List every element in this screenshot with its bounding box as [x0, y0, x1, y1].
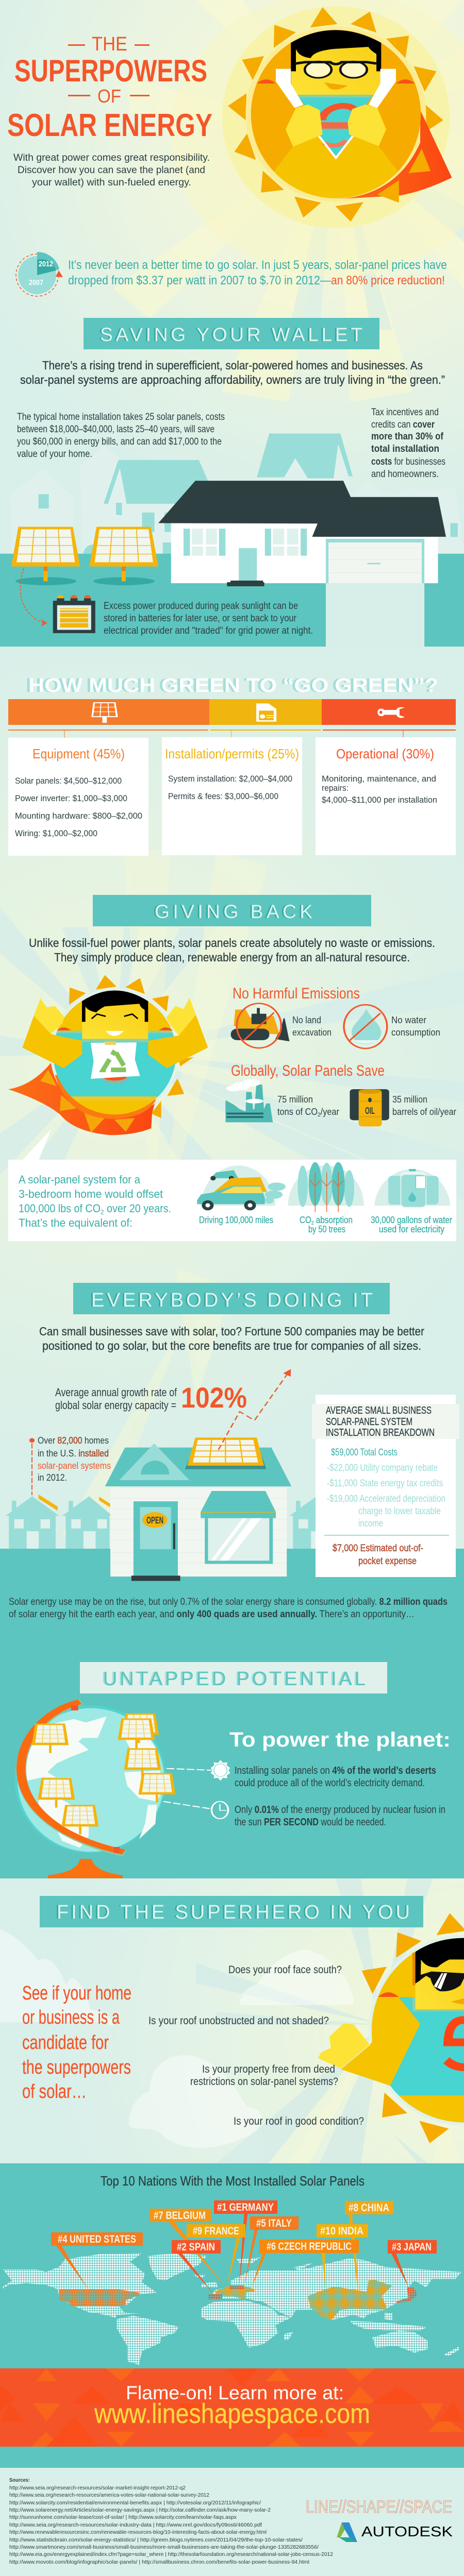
breakdown list: -$22,000 Utility company rebate [327, 1463, 438, 1473]
sources [9, 2477, 333, 2565]
text: roof questions: Is your roof in good condition? [234, 2115, 364, 2127]
text: oil saved: 35 million [392, 1094, 427, 1105]
breakdown heading: INSTALLATION BREAKDOWN [326, 1427, 435, 1438]
captions: CO [300, 1215, 313, 1225]
text: tax incentives: total installation [371, 444, 439, 454]
icon: battery [53, 595, 95, 633]
equipment list: Solar panels: $4,500–$12,000 [15, 776, 122, 786]
text: roof questions [148, 1964, 364, 2127]
shop building [105, 1437, 291, 1581]
text: offset statement: 100,000 lbs of CO [19, 1202, 110, 1215]
text: CO2 saved: 2 [318, 1112, 321, 1118]
sources: http://www.smartmoney.com/small-business/small-business/more-small-businesses-are-taking-the-solar-plunge-1335282683556/ [9, 2544, 319, 2550]
captions [199, 1215, 452, 1234]
logo: Autodesk: AUTODESK [361, 2523, 453, 2539]
equipment list: Power inverter: $1,000–$3,000 [15, 793, 127, 803]
text: solar use opportunity: Solar energy use may be on the rise, but only 0.7% of the solar energy share is consumed globally. 8.2 million quads [9, 1597, 448, 1607]
title line: OF: OF [97, 86, 121, 107]
icon: document [256, 703, 276, 722]
heading: how much green: HOW MUCH GREEN TO “GO GREEN”? [28, 675, 438, 697]
background: sky with rays (middle) [0, 647, 464, 1553]
icon: no water drop [344, 1005, 387, 1048]
text: roof questions: restrictions on solar-panel systems? [190, 2076, 338, 2088]
operational list: repairs: [322, 783, 349, 793]
text: tax incentives: Tax incentives and [371, 407, 439, 418]
sources: http://www.seia.org/research-resources/solar-market-insight-report-2012-q2 [9, 2485, 186, 2491]
sources: http://www.renewableresourcesinc.com/renewable-resources-blog/10-interesting-facts-about-solar-energy.html [9, 2529, 267, 2535]
sources: http://www.seia.org/research-resources/america-votes-solar-national-solar-survey-2012 [9, 2492, 209, 2498]
icon: pie chart 2007 to 2012 [16, 252, 63, 296]
text: 82,000 homes: solar-panel systems [38, 1461, 111, 1471]
text: typical home installation: between $18,000–$40,000, lasts 25–40 years, will save [17, 424, 214, 435]
text: deserts fact [235, 1765, 436, 1789]
cost breakdown bar with icons [8, 699, 456, 725]
stat: 102%: 102% [181, 1381, 247, 1414]
text: see if your home: See if your home [22, 1982, 131, 2004]
text: tax incentives: costs for businesses [371, 456, 445, 467]
intro paragraph: giving back [29, 936, 435, 964]
subtitle: With great power comes great responsibility. [13, 152, 210, 163]
section banner: saving your wallet [84, 318, 379, 349]
label: Belgium: #7 BELGIUM [154, 2210, 206, 2222]
icon: no excavation bulldozer [231, 1004, 289, 1048]
text: typical home installation: The typical home installation takes 25 solar panels, costs [17, 412, 225, 422]
section banner: find the superhero in you: FIND THE SUPERHERO IN YOU [57, 1902, 410, 1923]
background: teal ground lower [0, 1549, 464, 1878]
installation list: System installation: $2,000–$4,000 [168, 774, 292, 784]
intro paragraph: giving back: They simply produce clean, renewable energy from an all-natural resource. [54, 951, 410, 964]
icon: oil barrel: OIL [365, 1106, 375, 1116]
section banner: saving your wallet: SAVING YOUR WALLET [100, 324, 362, 345]
section banner: find the superhero in you [40, 1896, 423, 1927]
panel: installation breakdown [312, 1395, 459, 1577]
heading: installation: Installation/permits (25%) [165, 746, 299, 761]
subtitle: Discover how you can save the planet (and [18, 165, 205, 176]
breakdown list [324, 1447, 449, 1567]
text: no water consumption: No water [391, 1015, 426, 1025]
intro paragraph: giving back: Unlike fossil-fuel power plants, solar panels create absolutely no waste or emissions. [29, 936, 435, 950]
CTA line: Flame-on! Learn more at: [126, 2382, 344, 2403]
text: oil saved: barrels of oil/year [392, 1107, 456, 1117]
background: sky with sun rays (top) [0, 0, 464, 649]
captions: used for electricity [379, 1224, 444, 1234]
text: 82,000 homes [38, 1435, 111, 1483]
text: 82,000 homes: in the U.S. installed [38, 1448, 109, 1459]
price drop stat [16, 252, 447, 296]
operational list: Monitoring, maintenance, and [322, 774, 436, 784]
icon: clock [211, 1802, 228, 1819]
intro paragraph: saving your wallet [20, 359, 445, 386]
operational list [322, 774, 437, 805]
globe stand [21, 1702, 124, 1878]
icon: water jugs [374, 1169, 451, 1208]
text: see if your home: candidate for [22, 2032, 109, 2054]
label: Italy: #5 ITALY [256, 2217, 292, 2229]
stat text [68, 258, 447, 287]
map leaders [56, 2214, 409, 2294]
text: growth rate: global solar energy capacity = [55, 1399, 176, 1412]
icon: pie chart 2007 to 2012: 2012 [39, 260, 53, 268]
title line: THE: THE [92, 33, 127, 55]
text: typical home installation: value of your home. [17, 449, 92, 460]
sources: http://www.seia.org/research-resources/solar-industry-data | http://www.nrel.gov/docs/fy09osti/46060.pdf [9, 2522, 262, 2528]
solar panels [11, 527, 158, 585]
equipment list: Wiring: $1,000–$2,000 [15, 828, 97, 838]
section banner: untapped potential [80, 1662, 387, 1693]
panel: equipment [8, 738, 148, 856]
decorative triangles [31, 2368, 464, 2447]
panel: operational [316, 737, 456, 855]
captions: absorption [314, 1215, 353, 1225]
text: CO2 saved: tons of CO [277, 1107, 322, 1117]
section banner: giving back: GIVING BACK [155, 901, 312, 922]
text: CO2 saved [277, 1094, 339, 1118]
panel: equivalents [8, 1129, 456, 1241]
stat text: an 80% price reduction! [331, 274, 445, 287]
label: Spain: #2 SPAIN [177, 2241, 215, 2253]
sources: http://www.eia.gov/energyexplained/index.cfm?page=solar_where | http://thesolarfoundation.org/research/national-solar-jobs-census-2012 [9, 2551, 333, 2557]
text: CO2 saved: 75 million [277, 1094, 313, 1105]
section banner: everybody's doing it: EVERYBODY’S DOING IT [91, 1290, 373, 1311]
dashed leader lines [163, 1769, 211, 1809]
icon: pie chart 2007 to 2012: 2007 [29, 278, 43, 287]
label: France: #9 FRANCE [193, 2225, 239, 2237]
text: solar use opportunity [9, 1597, 448, 1620]
label: Germany: #1 GERMANY [217, 2201, 274, 2213]
section banner: everybody's doing it [73, 1283, 390, 1314]
sources: http://www.movoto.com/blog/infographic/solar-panels/ | http://smallbusiness.chron.com/benefits-solar-power-business-94.html [9, 2559, 309, 2565]
title [7, 33, 212, 143]
breakdown heading: SOLAR-PANEL SYSTEM [326, 1416, 412, 1428]
CTA url: www.lineshapespace.com [94, 2398, 370, 2429]
illustration: shop with solar panel and neighbours [5, 1369, 317, 1581]
stat text: dropped from $3.37 per watt in 2007 to $.70 in 2012— [68, 274, 331, 287]
text: typical home installation: you $60,000 in energy bills, and can add $17,000 to the [17, 436, 222, 447]
title line: THE [68, 33, 150, 55]
captions: 2 [311, 1221, 314, 1226]
label: Czech Republic: #6 CZECH REPUBLIC [267, 2241, 352, 2252]
sources: http://sunrunhome.com/solar-lease/cost-of-solar/ | http://www.solarcity.com/learn/solar-faqs.aspx [9, 2514, 237, 2520]
illustration: globe with solar panels [14, 1702, 230, 1878]
heading: operational: Operational (30%) [336, 746, 434, 761]
text: tax incentives: and homeowners. [371, 469, 439, 480]
text: offset statement: over 20 years. [104, 1202, 171, 1215]
section banner: giving back [93, 895, 371, 926]
text: excess power batteries [104, 601, 313, 636]
text: no land excavation [292, 1015, 332, 1038]
illustration: sun with sunglasses [318, 1913, 464, 2143]
heading: globally solar panels save: Globally, Solar Panels Save [231, 1062, 385, 1079]
breakdown list: charge to lower taxable [358, 1506, 441, 1517]
continents [24, 1717, 164, 1848]
text: offset statement: 3-bedroom home would offset [19, 1188, 163, 1200]
icon: wrench [377, 707, 405, 718]
text: OPEN sign: OPEN [146, 1515, 163, 1526]
title line: OF [68, 86, 150, 107]
sources: http://www.solarcity.com/residential/environmental-benefits.aspx | http://votesolar.org/2012/11/infographic/ [9, 2500, 261, 2506]
icon: cars [197, 1165, 286, 1210]
text: fusion fact: the sun PER SECOND would be needed. [235, 1817, 386, 1828]
arm and fist [318, 1997, 420, 2086]
sources: http://www.solarenergy.net/Articles/solar-energy-savings.aspx | http://solar.calfinder.com/ask/how-many-solar-2 [9, 2507, 271, 2513]
label: China: #8 CHINA [349, 2202, 389, 2214]
text: see if your home: or business is a [22, 2007, 120, 2028]
text: roof questions: Does your roof face south? [228, 1964, 342, 1976]
text: typical home installation [17, 412, 225, 460]
breakdown heading: AVERAGE SMALL BUSINESS [326, 1405, 432, 1416]
intro paragraph: everybody's doing it [39, 1325, 424, 1352]
breakdown list: $7,000 Estimated out-of- [333, 1543, 423, 1554]
hero: sun superhero with glasses [170, 0, 464, 277]
text: growth rate: Average annual growth rate of [55, 1386, 177, 1399]
icon: factory [225, 1079, 273, 1122]
arrow: growth [219, 1369, 291, 1450]
text: see if your home: of solar… [22, 2081, 87, 2103]
label: India: #10 INDIA [320, 2225, 363, 2237]
sources: http://www.statisticbrain.com/solar-energy-statistics/ | http://green.blogs.nytimes.com/2011/04/29/the-top-10-solar-states/ [9, 2537, 303, 2543]
icon: trees [288, 1162, 364, 1212]
text: no land excavation: excavation [292, 1027, 332, 1038]
breakdown heading [326, 1405, 435, 1438]
text: no water consumption: consumption [391, 1027, 440, 1038]
intro paragraph: everybody's doing it: Can small businesses save with solar, too? Fortune 500 companies may be better [39, 1325, 424, 1338]
text: roof questions: Is your property free from deed [202, 2063, 335, 2075]
text: oil saved [392, 1094, 456, 1117]
sources: Sources: [9, 2477, 30, 2483]
text: offset statement: That’s the equivalent of: [19, 1216, 132, 1229]
text: tax incentives: credits can cover [371, 419, 435, 430]
text: offset statement: 2 [101, 1208, 104, 1216]
icon: oil barrel [350, 1089, 389, 1126]
recycling sign [91, 1042, 140, 1079]
text: growth rate [55, 1386, 177, 1412]
arms and fists [22, 998, 208, 1068]
captions: Driving 100,000 miles [199, 1215, 273, 1225]
text: excess power batteries: electrical provider and "traded" for grid power at night. [104, 625, 313, 636]
installation list: Permits & fees: $3,000–$6,000 [168, 791, 278, 801]
captions: by 50 trees [308, 1224, 345, 1234]
text: offset statement [19, 1173, 171, 1229]
marker: homes pin [29, 1438, 35, 1495]
operational list: $4,000–$11,000 per installation [322, 795, 437, 805]
label: Japan: #3 JAPAN [392, 2241, 432, 2253]
text: tax incentives [371, 407, 445, 480]
breakdown list: $59,000 Total Costs [331, 1447, 397, 1458]
intro paragraph: everybody's doing it: positioned to go solar, but the core benefits are true for companies of all sizes. [42, 1339, 421, 1352]
intro paragraph: saving your wallet: There’s a rising trend in superefficient, solar-powered homes and businesses. As [42, 359, 423, 372]
text: roof questions: Is your roof unobstructed and not shaded? [148, 2015, 329, 2027]
heading: equipment: Equipment (45%) [32, 746, 125, 761]
text: deserts fact: could produce all of the world’s electricity demand. [235, 1777, 425, 1789]
text: excess power batteries: Excess power produced during peak sunlight can be [104, 601, 298, 612]
background: sky with rays (superhero section) [0, 1878, 464, 2163]
connector lines [8, 730, 456, 738]
text: tax incentives: more than 30% of [371, 431, 444, 442]
text: no land excavation: No land [292, 1015, 321, 1025]
footer background [0, 2468, 464, 2576]
panel: top 10 nations [0, 2163, 464, 2368]
country labels [51, 2200, 437, 2253]
text: deserts fact: Installing solar panels on 4% of the world’s deserts [235, 1765, 436, 1776]
text: CO2 saved: /year [321, 1107, 339, 1117]
section banner: untapped potential: UNTAPPED POTENTIAL [103, 1668, 366, 1690]
illustration: happy sun with recycling sign [8, 975, 208, 1135]
neighbouring houses [5, 1495, 317, 1549]
icon: sun [211, 1760, 230, 1781]
heading: top 10 nations: Top 10 Nations With the Most Installed Solar Panels [101, 2173, 364, 2189]
text: solar use opportunity: of solar energy hit the earth each year, and only 400 quads are used annually. There’s an opportunity… [9, 1609, 415, 1620]
icon: solar panel [92, 703, 117, 723]
breakdown list: pocket expense [358, 1556, 417, 1567]
subtitle [13, 152, 210, 188]
heading: no harmful emissions: No Harmful Emissions [233, 985, 360, 1002]
equipment list: Mounting hardware: $800–$2,000 [15, 811, 142, 821]
title line: SOLAR ENERGY: SOLAR ENERGY [7, 108, 212, 143]
text: 82,000 homes: in 2012. [38, 1472, 67, 1483]
panel: call to action [0, 2368, 464, 2447]
text: 82,000 homes: Over 82,000 homes [38, 1435, 109, 1446]
intro paragraph: saving your wallet: solar-panel systems are approaching affordability, owners are truly living in “the green.” [20, 373, 445, 386]
text: excess power batteries: stored in batteries for later use, or sent back to your [104, 613, 297, 624]
captions: 30,000 gallons of water [371, 1215, 452, 1225]
equipment list [15, 776, 142, 838]
heading: to power the planet: To power the planet: [229, 1728, 451, 1751]
panel: installation and permits [162, 737, 302, 855]
text: fusion fact [235, 1804, 445, 1828]
text: no water consumption [391, 1015, 440, 1038]
text: offset statement: A solar-panel system for a [19, 1173, 141, 1186]
dot map [2, 2214, 461, 2365]
subtitle: your wallet) with sun-fueled energy. [32, 177, 191, 188]
installation list [168, 774, 292, 801]
main house [158, 481, 446, 586]
text: see if your home [22, 1982, 131, 2103]
background clouds [0, 1929, 353, 2148]
breakdown list: income [358, 1518, 383, 1529]
panels on globe [31, 1713, 175, 1835]
label: United States: #4 UNITED STATES [58, 2233, 136, 2245]
logo: Autodesk [337, 2522, 453, 2542]
title line: SUPERPOWERS: SUPERPOWERS [14, 54, 207, 88]
illustration: house with solar panels [0, 433, 464, 647]
arrow: panels to battery [21, 568, 47, 626]
teal divider band [0, 2447, 464, 2468]
text: see if your home: the superpowers [22, 2057, 131, 2078]
